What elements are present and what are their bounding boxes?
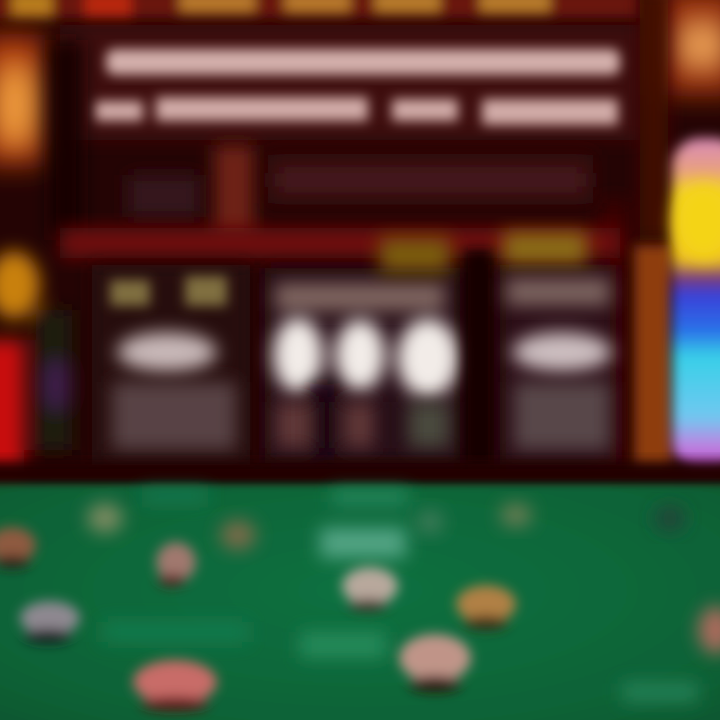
- slot machine: right: [500, 232, 616, 465]
- chip: [20, 601, 80, 643]
- rainbow arcade sign at right edge: [672, 138, 720, 470]
- white reel band: [117, 332, 217, 372]
- felt text markings: [102, 490, 698, 701]
- gold label: [503, 232, 587, 264]
- slot machine: left: [92, 265, 250, 465]
- glowing lights: top left column: [0, 35, 45, 165]
- slot machine divider pillar: [464, 250, 494, 465]
- gold top labels: [110, 276, 227, 306]
- marquee lights along the top: [0, 0, 640, 18]
- casino chips scattered on table: [0, 503, 720, 711]
- chip: [87, 503, 123, 533]
- chip: [399, 634, 471, 692]
- lower panel: [112, 382, 236, 450]
- lower panel: [514, 382, 610, 450]
- chip: [654, 505, 686, 531]
- white reel band: [512, 332, 612, 372]
- yellow section: [674, 184, 720, 260]
- slot machine: center: [265, 268, 460, 463]
- chip: [342, 567, 398, 611]
- upper slot machine screens: [128, 155, 593, 217]
- green felt table: [0, 484, 720, 720]
- top label: [275, 283, 445, 311]
- chip: [456, 585, 516, 630]
- chip: [416, 510, 444, 534]
- chip: [133, 660, 217, 711]
- red horizontal rail: [60, 228, 620, 258]
- right side orange pillar: [634, 245, 672, 470]
- gold label above center-right machine: [380, 238, 450, 272]
- chip: [156, 542, 196, 586]
- title line one: [106, 49, 620, 75]
- lower panels: [276, 385, 450, 460]
- vertical wooden pillars: [50, 0, 668, 470]
- chip: [220, 520, 256, 550]
- chip: [500, 503, 532, 527]
- grey band: [506, 278, 610, 306]
- chip: [698, 606, 720, 654]
- chip: [0, 527, 36, 568]
- dark strip under the machines: [0, 462, 720, 486]
- left edge red and yellow lights: [0, 251, 72, 475]
- title panel: blurred white headline: [95, 49, 620, 125]
- white reels: [273, 317, 459, 398]
- title line two: [95, 97, 618, 125]
- glowing lights: top right corner: [660, 0, 720, 95]
